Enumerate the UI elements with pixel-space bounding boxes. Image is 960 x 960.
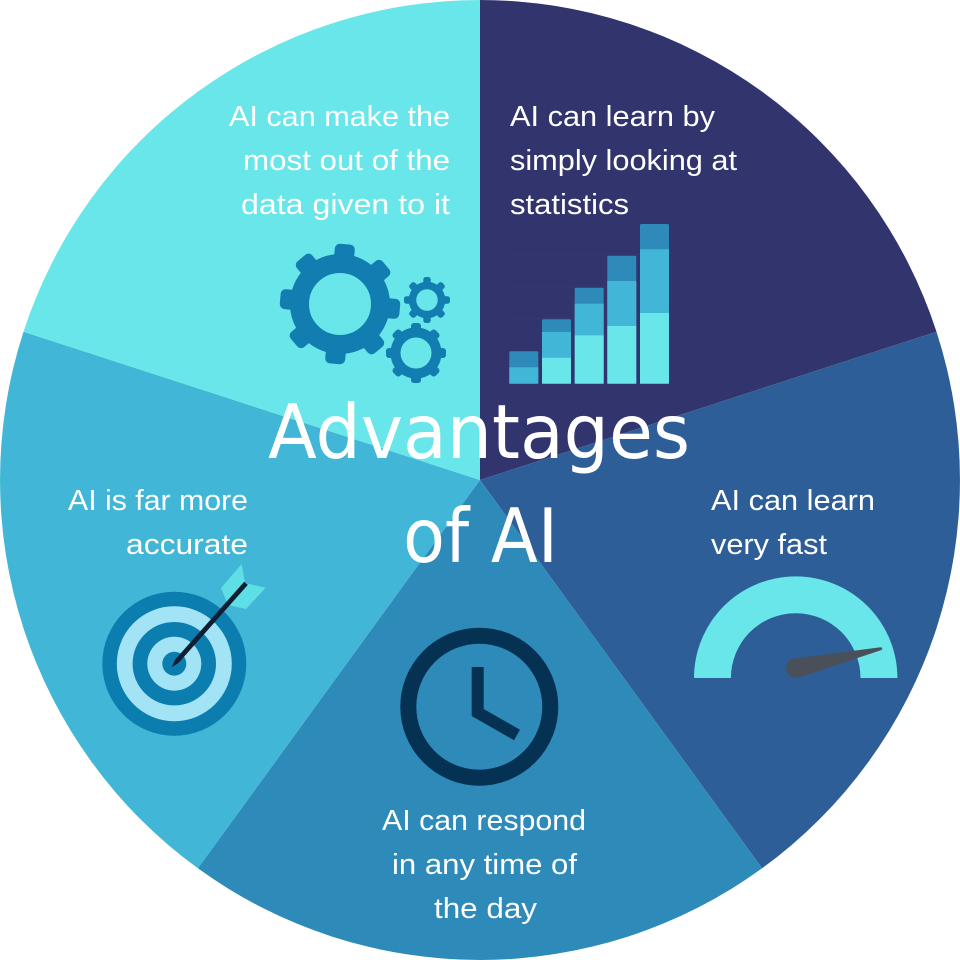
text: accurate slice: AI is far more (68, 485, 248, 517)
text: data slice (229, 101, 450, 221)
icon: stacked bar chart (509, 224, 669, 384)
text: statistics slice: simply looking at (510, 145, 737, 177)
small lower gear (386, 323, 446, 383)
text: data slice: AI can make the (229, 101, 450, 133)
bar 3 (575, 288, 604, 384)
small upper gear (404, 277, 450, 323)
bar 4 (607, 256, 636, 384)
text: statistics slice: AI can learn by (510, 101, 716, 133)
large gear (279, 243, 401, 365)
icon: speedometer gauge (694, 576, 897, 678)
text: any time slice: in any time of (392, 849, 578, 881)
bar 5 (640, 224, 669, 384)
text: fast slice: very fast (711, 529, 827, 561)
text: accurate slice (68, 485, 248, 561)
slice: make the most of data (24, 0, 480, 480)
title (268, 388, 690, 580)
text: fast slice: AI can learn (711, 485, 875, 517)
icon: target with arrow (102, 564, 266, 736)
text: fast slice (711, 485, 875, 561)
slice: accurate (0, 332, 480, 868)
text: any time slice: the day (434, 893, 538, 925)
text: any time slice (382, 805, 586, 925)
text: any time slice: AI can respond (382, 805, 586, 837)
title: Advantages (268, 388, 690, 476)
title: of AI (403, 492, 558, 580)
text: data slice: most out of the (243, 145, 450, 177)
bar 1 (509, 351, 538, 384)
icon: clock (408, 636, 550, 778)
text: statistics slice: statistics (510, 189, 629, 221)
text: data slice: data given to it (241, 189, 450, 221)
text: statistics slice (510, 101, 737, 221)
bar 2 (542, 319, 571, 384)
slice: learn by statistics (480, 0, 936, 480)
text: accurate slice: accurate (126, 529, 248, 561)
slice: learn fast (480, 332, 960, 868)
slice: respond any time (198, 480, 762, 960)
icon: gears (279, 243, 450, 383)
